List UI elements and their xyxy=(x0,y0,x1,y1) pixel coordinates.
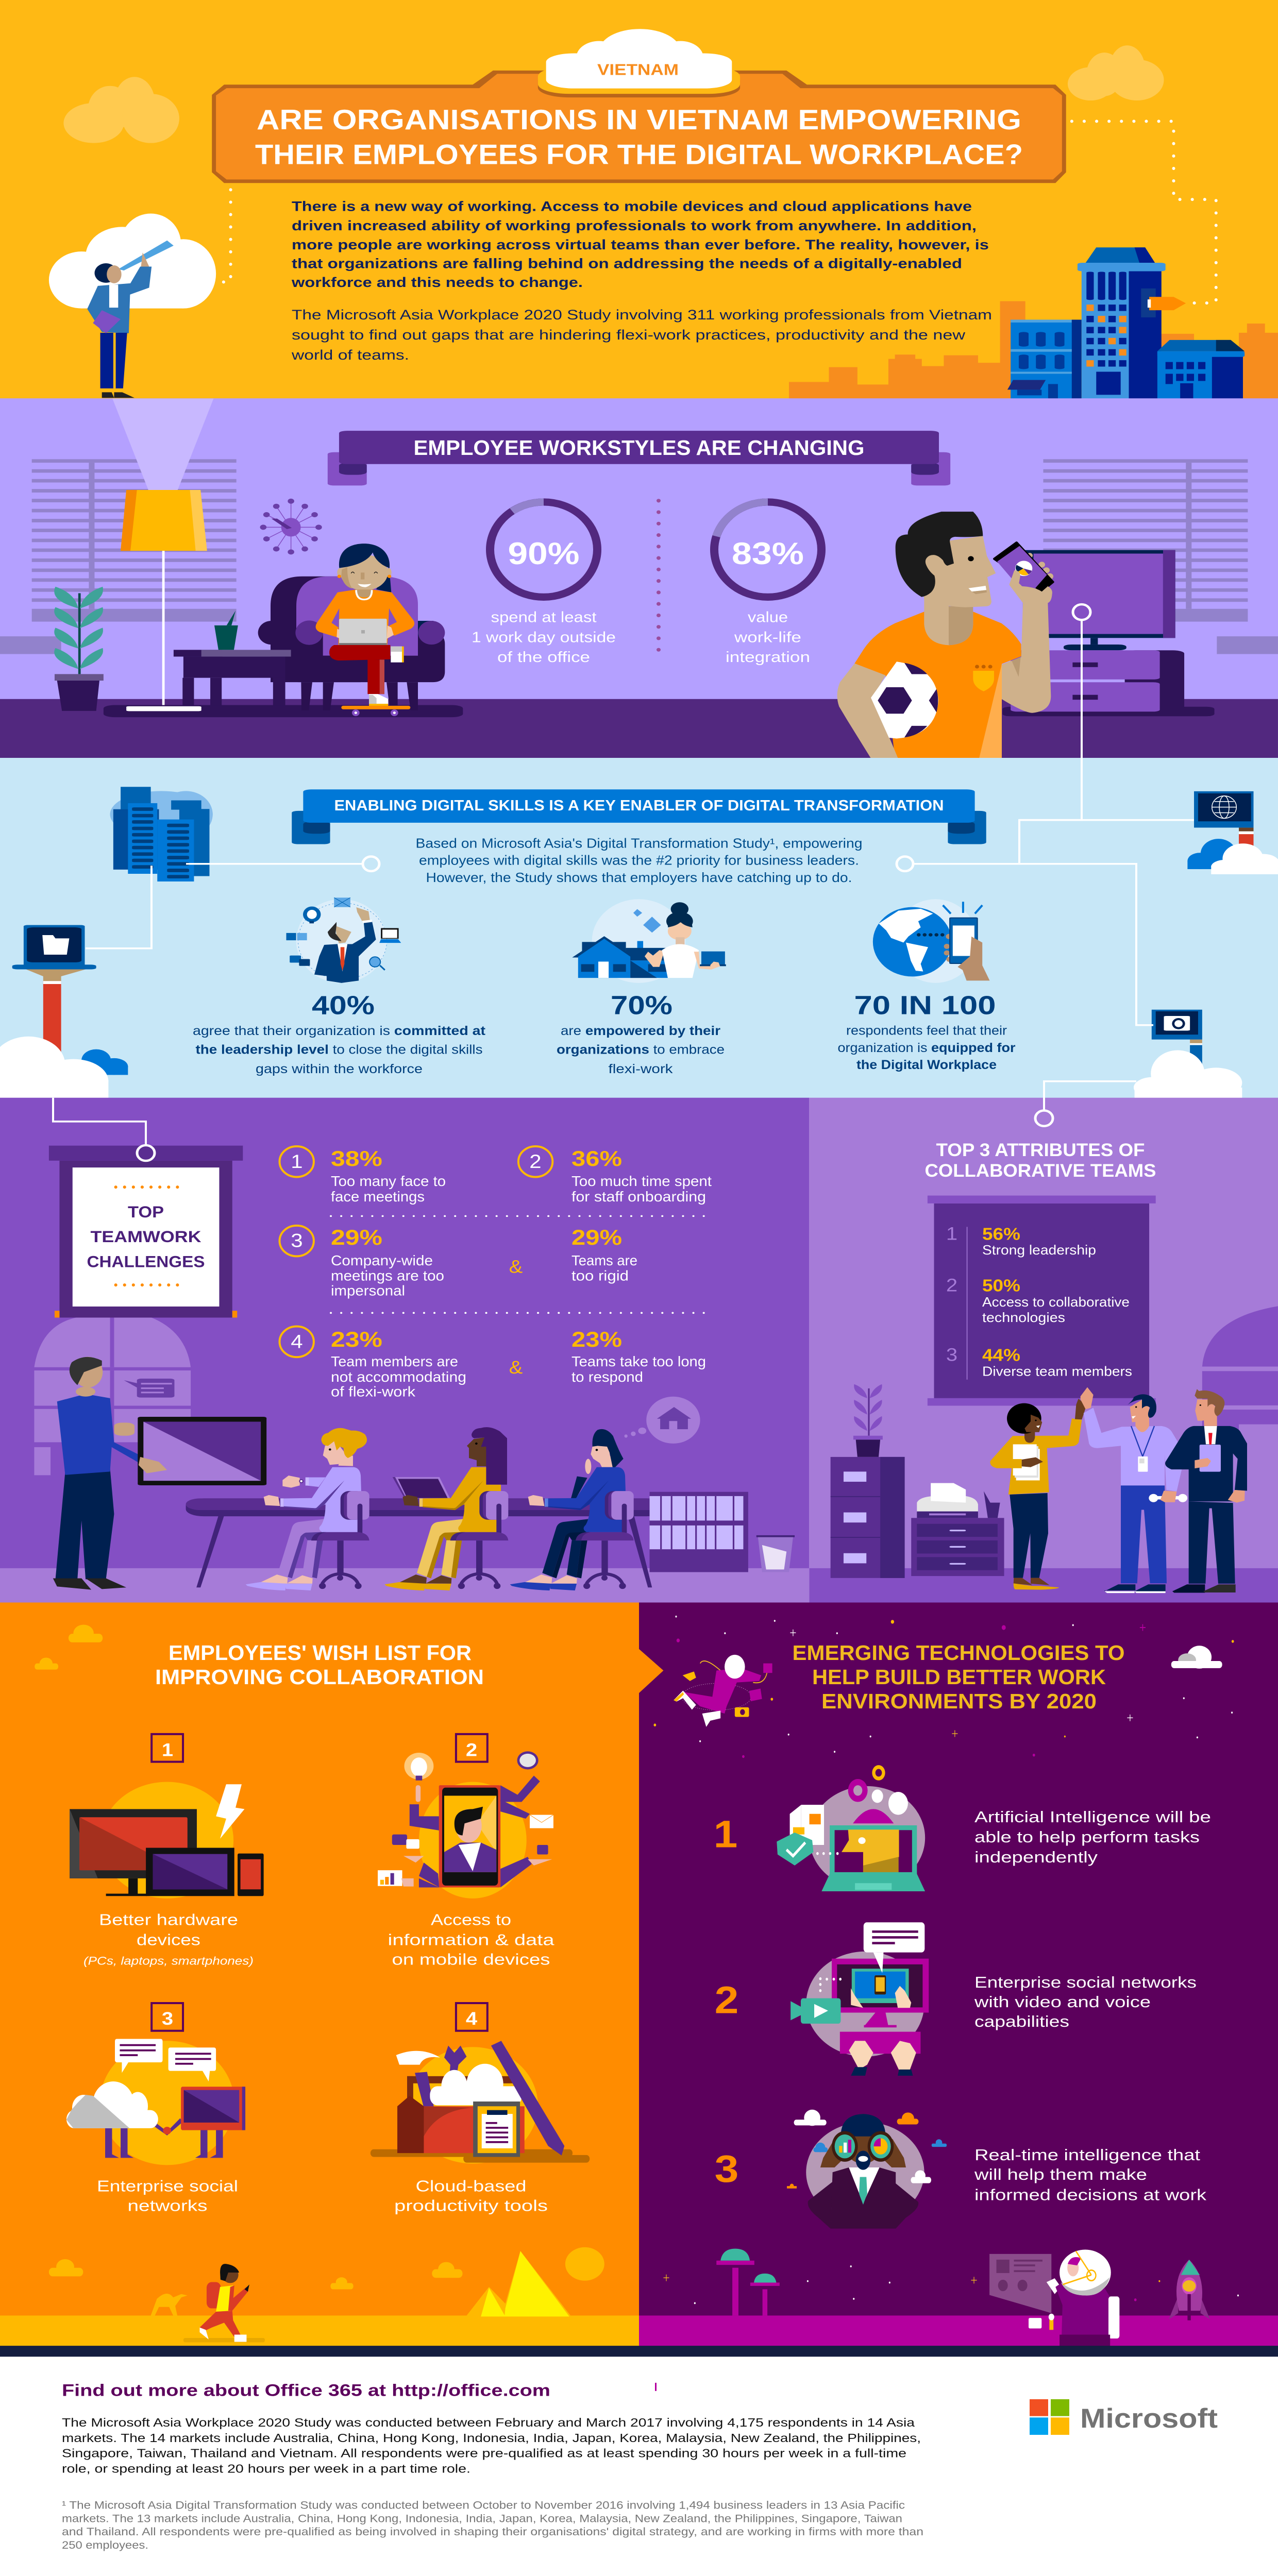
wish 2: on mobile devices xyxy=(392,1951,550,1968)
challenge 3b xyxy=(571,1226,637,1284)
intro paragraph bold: workforce and this needs to change. xyxy=(291,275,583,290)
wish list heading: EMPLOYEES' WISH LIST FOR xyxy=(169,1642,472,1665)
challenge 4b: 23% xyxy=(571,1328,622,1351)
icon: hardware devices xyxy=(70,1782,264,1899)
attribute 2: Access to collaborative xyxy=(982,1294,1130,1310)
stat: 70%: 70% xyxy=(611,990,672,1020)
arrow notch xyxy=(639,1649,663,1693)
attribute 3: 44% xyxy=(982,1345,1020,1365)
stat: 83%: 83% xyxy=(732,536,804,571)
icon: waste bin xyxy=(756,1535,795,1572)
label: 83%: work-life xyxy=(734,630,801,646)
box numbers: 2 xyxy=(466,1740,477,1760)
icon: camera tablet on arm xyxy=(1152,1010,1202,1069)
challenge 1: Too many face to xyxy=(331,1173,446,1189)
icon: small clouds top xyxy=(35,1624,103,1670)
footer study paragraph: role, or spending at least 20 hours per week in a part time role. xyxy=(62,2463,470,2476)
stat: 40%: 40% xyxy=(312,990,375,1020)
tech 3 text: Real-time intelligence that xyxy=(974,2146,1200,2164)
stat: 70 in 100: 70 IN 100 xyxy=(854,990,996,1020)
number circles xyxy=(279,1146,552,1357)
challenge 3a: 29% xyxy=(331,1226,382,1250)
poster title: CHALLENGES xyxy=(87,1253,205,1271)
intro paragraph regular: The Microsoft Asia Workplace 2020 Study involving 311 working professionals from Vietnam xyxy=(292,307,992,323)
stat: 70 in 100: respondents feel that their xyxy=(846,1023,1007,1038)
footer study paragraph: markets. The 14 markets include Australia, China, Hong Kong, Indonesia, India, Japan, Korea, Malaysia, New Zealand, the Philippines, xyxy=(62,2432,921,2445)
icon: white cloud xyxy=(1171,1646,1222,1669)
wish 4 xyxy=(394,2177,548,2214)
title banner shape xyxy=(212,66,1066,183)
challenge 4a xyxy=(331,1328,466,1400)
challenge 3b: too rigid xyxy=(571,1268,629,1284)
tech 1 number: 1 xyxy=(714,1812,737,1856)
box numbers: 4 xyxy=(466,2009,477,2029)
wish 2 xyxy=(388,1911,554,1968)
footnote paragraph: markets. The 13 markets include Australia, China, Hong Kong, Indonesia, India, Japan, Korea, Malaysia, New Zealand, the Philippines, Singapore, Taiwan xyxy=(62,2512,902,2524)
attributes heading: COLLABORATIVE TEAMS xyxy=(924,1161,1156,1181)
ring: 90 percent xyxy=(490,502,597,597)
wish 1: Better hardware xyxy=(99,1911,238,1928)
dotted rows xyxy=(331,1216,714,1313)
tech 3 text: will help them make xyxy=(974,2166,1147,2183)
icon: man with binoculars xyxy=(787,2110,947,2229)
tech 2 text: with video and voice xyxy=(974,1993,1151,2011)
box numbers xyxy=(162,1740,477,2029)
attributes heading xyxy=(924,1140,1156,1181)
icon: tv and cabinet xyxy=(1002,550,1215,716)
footnote paragraph: and Thailand. All respondents were pre-qualified as being involved in shaping their organisations' digital strategy, and are working in firms with more than xyxy=(62,2525,923,2538)
stat: 90%: 90% xyxy=(508,536,580,571)
icon: window xyxy=(34,1317,191,1475)
microsoft logo: Microsoft xyxy=(1080,2403,1218,2434)
footer link: Find out more about Office 365 at http://office.com xyxy=(62,2381,550,2400)
challenge 1 xyxy=(331,1147,446,1205)
icon: meeting table xyxy=(186,1498,664,1587)
label: 83%: value xyxy=(748,609,788,625)
challenge 2: Too much time spent xyxy=(571,1173,712,1189)
challenge 4b: to respond xyxy=(571,1369,643,1385)
intro text: employees with digital skills was the #2 priority for business leaders. xyxy=(419,853,859,868)
icon: astronaut at hologram xyxy=(989,2249,1119,2346)
intro paragraph bold: that organizations are falling behind on addressing the needs of a digitally-enabled xyxy=(292,256,962,272)
stars xyxy=(653,1616,1239,2304)
number boxes xyxy=(152,1734,487,2031)
intro paragraph regular: sought to find out gaps that are hindering flexi-work practices, productivity and the new xyxy=(292,327,966,343)
blinds right xyxy=(1043,459,1278,654)
icon: mobile person xyxy=(378,1751,553,1899)
stat: 70 in 100: the Digital Workplace xyxy=(856,1057,997,1072)
microsoft logo xyxy=(1030,2399,1218,2435)
challenge 1: face meetings xyxy=(331,1189,425,1205)
dotted connector right xyxy=(1072,121,1216,303)
tech 3 number: 3 xyxy=(715,2147,738,2190)
icon: vietnam cloud xyxy=(546,29,732,89)
icon: side table xyxy=(174,611,291,706)
challenge 4b: Teams take too long xyxy=(571,1354,706,1370)
challenge 3a: impersonal xyxy=(331,1283,405,1299)
label: 90%: 1 work day outside xyxy=(472,630,616,646)
footnote paragraph: ¹ The Microsoft Asia Digital Transformation Study was conducted between October to November 2016 involving 1,494 business leaders in 13 Asia Pacific xyxy=(62,2499,905,2511)
numbers: 1 xyxy=(291,1151,303,1173)
challenge 4b xyxy=(571,1328,706,1385)
icon: globe and phone xyxy=(873,899,990,983)
challenge 1: 38% xyxy=(331,1147,382,1171)
icon: mushroom towers xyxy=(716,2249,780,2315)
challenge 4a: Team members are xyxy=(331,1354,458,1370)
icon: astronaut xyxy=(674,1655,772,1727)
heading banner xyxy=(292,789,986,844)
wish 1 xyxy=(83,1911,254,1968)
wish 1: devices xyxy=(137,1931,200,1948)
challenge 4a: of flexi-work xyxy=(331,1384,415,1400)
numbers xyxy=(291,1151,542,1352)
stat: 40%: the leadership level to close the digital skills xyxy=(196,1042,483,1057)
stat: 40%: agree that their organization is committed at xyxy=(193,1024,485,1038)
poster title xyxy=(87,1203,205,1271)
tech 2 text: Enterprise social networks xyxy=(974,1974,1197,1991)
icon: man on phone with football xyxy=(837,512,1053,758)
tech 1 text: able to help perform tasks xyxy=(974,1828,1200,1846)
connector lines xyxy=(53,604,1194,1161)
icon: orange skyline xyxy=(789,301,1278,399)
icon: laptop folder on arm xyxy=(12,925,96,1058)
challenge 2 xyxy=(571,1147,712,1205)
challenge 3a: meetings are too xyxy=(331,1268,444,1284)
icon: chat bubble on wall xyxy=(124,1379,174,1398)
label: 90%: of the office xyxy=(497,649,590,665)
icon: man in suit xyxy=(1165,1389,1247,1593)
tech 2 text xyxy=(974,1974,1197,2030)
icon: woman with laptop on skateboard xyxy=(316,544,414,716)
box numbers: 3 xyxy=(162,2009,173,2029)
navy strip xyxy=(0,2346,1278,2357)
ampersand: & xyxy=(509,1358,523,1378)
icon: light cloud left xyxy=(63,77,179,143)
heading banner xyxy=(328,431,950,485)
challenge 3a xyxy=(331,1226,444,1299)
numbers: 2 xyxy=(529,1151,542,1173)
icon: cloud toolbox xyxy=(371,2041,590,2164)
stat: 70%: are empowered by their xyxy=(561,1024,720,1038)
tech 3 text xyxy=(974,2146,1207,2204)
attribute 3 xyxy=(946,1345,1132,1379)
attribute 1: 56% xyxy=(982,1224,1020,1244)
footer study paragraph: Singapore, Taiwan, Thailand and Vietnam. All respondents were pre-qualified as at least spending 30 hours per week in a full-time xyxy=(62,2447,906,2460)
intro paragraph regular: world of teams. xyxy=(291,347,409,363)
intro paragraph bold: There is a new way of working. Access to mobile devices and cloud applications have xyxy=(292,199,972,214)
intro paragraph bold: more people are working across virtual teams than ever before. The reality, however, is xyxy=(292,238,989,253)
panel: top teamwork challenges xyxy=(0,1098,810,1603)
icon: woman high five xyxy=(990,1399,1086,1590)
intro text: However, the Study shows that employers have catching up to do. xyxy=(426,870,852,885)
poster xyxy=(49,1146,243,1317)
stat: 70 in 100: organization is equipped for xyxy=(838,1041,1015,1055)
tech 1 text: independently xyxy=(974,1849,1098,1866)
icon: man with digital tools xyxy=(286,897,401,983)
main title: ARE ORGANISATIONS IN VIETNAM EMPOWERING xyxy=(257,104,1021,135)
poster title: TEAMWORK xyxy=(90,1228,201,1246)
intro paragraph bold: driven increased ability of working professionals to work from anywhere. In addition, xyxy=(292,218,977,233)
tech 1 text: Artificial Intelligence will be xyxy=(974,1808,1211,1826)
wish 3: networks xyxy=(128,2197,207,2214)
label: 90% xyxy=(472,609,616,665)
challenge 4a: 23% xyxy=(331,1328,382,1351)
icon: server towers xyxy=(110,787,213,882)
tech 2 number: 2 xyxy=(715,1978,738,2022)
ampersand: & xyxy=(509,1257,523,1277)
panel: wish list xyxy=(0,1602,639,2347)
heading: EMPLOYEE WORKSTYLES ARE CHANGING xyxy=(413,436,865,460)
heading: ENABLING DIGITAL SKILLS IS A KEY ENABLER OF DIGITAL TRANSFORMATION xyxy=(334,798,944,814)
emerging heading: EMERGING TECHNOLOGIES TO xyxy=(793,1642,1125,1665)
challenge 3a: Company-wide xyxy=(331,1253,433,1269)
attribute 2: technologies xyxy=(982,1310,1065,1325)
emerging heading: ENVIRONMENTS BY 2020 xyxy=(821,1690,1097,1714)
dotted connector left xyxy=(216,190,231,282)
dotted divider xyxy=(657,501,661,661)
icon: woman and house xyxy=(572,899,726,983)
footer study paragraph xyxy=(62,2416,921,2476)
challenge 2: 36% xyxy=(571,1147,622,1171)
icon: filing cabinet xyxy=(831,1457,905,1578)
label: 90%: spend at least xyxy=(491,609,597,625)
icon: social networks xyxy=(66,2039,245,2165)
emerging heading xyxy=(793,1642,1124,1714)
wish 2: information & data xyxy=(388,1931,554,1948)
icon: AI laptop xyxy=(777,1765,925,1891)
panel: emerging technologies xyxy=(639,1602,1278,2347)
intro text: Based on Microsoft Asia's Digital Transformation Study¹, empowering xyxy=(415,836,863,851)
wish 4: Cloud-based xyxy=(415,2177,527,2195)
label: 83%: integration xyxy=(726,649,810,665)
stat: 70 in 100 xyxy=(838,990,1015,1072)
icon: window right xyxy=(1202,1306,1278,1444)
numbers: 3 xyxy=(291,1230,303,1251)
challenge 3b: Teams are xyxy=(571,1253,637,1269)
stat: 70% xyxy=(557,990,725,1076)
wish 3: Enterprise social xyxy=(97,2177,238,2195)
wish 2: Access to xyxy=(431,1911,511,1928)
small mark xyxy=(655,2383,657,2391)
attributes board xyxy=(928,1196,1156,1405)
stat: 40% xyxy=(193,990,485,1076)
icon: hiker xyxy=(183,2264,265,2342)
icon: floor lamp xyxy=(112,399,213,706)
attribute 2: 50% xyxy=(982,1276,1020,1295)
icon: person two seated xyxy=(384,1427,508,1590)
icon: wall clock xyxy=(260,499,322,554)
stat: 70%: flexi-work xyxy=(608,1061,673,1076)
ring: 83 percent xyxy=(714,502,821,597)
attributes heading: TOP 3 ATTRIBUTES OF xyxy=(936,1140,1145,1161)
icon: rocket xyxy=(1169,2260,1210,2320)
icon: shelf xyxy=(650,1492,748,1572)
wish 1: (PCs, laptops, smartphones) xyxy=(83,1955,254,1968)
intro text xyxy=(415,836,863,885)
numbers: 4 xyxy=(291,1331,303,1352)
icon: printer desk xyxy=(911,1483,1004,1576)
icon: clouds lower left xyxy=(0,1037,128,1104)
panel: employee workstyles xyxy=(0,398,1278,759)
tech 3 text: informed decisions at work xyxy=(974,2186,1207,2204)
icon: person three seated xyxy=(510,1429,634,1590)
panel: digital skills xyxy=(0,758,1278,1104)
panel: top 3 attributes xyxy=(809,1098,1278,1603)
icon: enterprise social video xyxy=(791,1922,929,2076)
wish 3 xyxy=(97,2177,238,2214)
icon: globe tablet on arm xyxy=(1194,791,1254,853)
icon: white cloud behind woman xyxy=(49,214,216,309)
attribute 2 xyxy=(946,1276,1130,1325)
attribute 1: Strong leadership xyxy=(982,1242,1096,1257)
vietnam label: VIETNAM xyxy=(597,61,679,78)
floor shadow and lamp base xyxy=(104,705,463,717)
attribute 2: 2 xyxy=(946,1276,957,1296)
icon: woman with telescope xyxy=(87,241,174,398)
wish 4: productivity tools xyxy=(394,2197,548,2214)
panel: footer xyxy=(0,2357,1278,2576)
main title xyxy=(255,104,1023,171)
label: 83% xyxy=(726,609,810,665)
stat: 70%: organizations to embrace xyxy=(557,1042,725,1057)
challenge 3b: 29% xyxy=(571,1226,622,1250)
box numbers: 1 xyxy=(162,1740,173,1760)
icon: thought bubble house xyxy=(625,1397,700,1444)
intro paragraph bold xyxy=(291,199,989,290)
attribute 1 xyxy=(946,1224,1096,1257)
icon: presenter and screen xyxy=(53,1357,266,1590)
emerging heading: HELP BUILD BETTER WORK xyxy=(812,1666,1106,1689)
icon: cloud lower right xyxy=(1134,1050,1242,1098)
wish list heading xyxy=(155,1642,484,1689)
tech 1 text xyxy=(974,1808,1211,1866)
attribute 1: 1 xyxy=(946,1224,957,1244)
challenge 2: for staff onboarding xyxy=(571,1189,706,1205)
icon: blue city buildings xyxy=(1007,247,1245,399)
icon: man with lanyard xyxy=(1081,1387,1187,1593)
footer study paragraph: The Microsoft Asia Workplace 2020 Study was conducted between February and March 2017 involving 4,175 respondents in 14 Asia xyxy=(62,2416,915,2430)
footnote paragraph xyxy=(62,2499,923,2551)
main title: THEIR EMPLOYEES FOR THE DIGITAL WORKPLACE? xyxy=(255,139,1023,171)
attribute 3: Diverse team members xyxy=(982,1364,1132,1379)
icon: clouds upper right xyxy=(1187,839,1278,874)
footnote paragraph: 250 employees. xyxy=(62,2538,148,2551)
icon: plant on cabinet xyxy=(853,1384,883,1457)
blinds left xyxy=(0,459,237,654)
icon: person one seated xyxy=(246,1428,369,1590)
attribute 3: 3 xyxy=(946,1345,957,1365)
icon: armchair xyxy=(258,577,445,710)
panel: intro header xyxy=(0,0,1278,399)
poster title: TOP xyxy=(128,1203,164,1222)
intro paragraph regular xyxy=(291,307,992,363)
challenge 4a: not accommodating xyxy=(331,1369,466,1385)
tech 2 text: capabilities xyxy=(974,2013,1069,2030)
icon: laptop on table xyxy=(393,1477,450,1498)
icon: potted plant xyxy=(54,587,104,711)
icon: light cloud right xyxy=(1068,45,1164,100)
wish list heading: IMPROVING COLLABORATION xyxy=(155,1666,484,1689)
stat: 40%: gaps within the workforce xyxy=(256,1061,423,1076)
icon: desert scenery xyxy=(49,2247,604,2316)
